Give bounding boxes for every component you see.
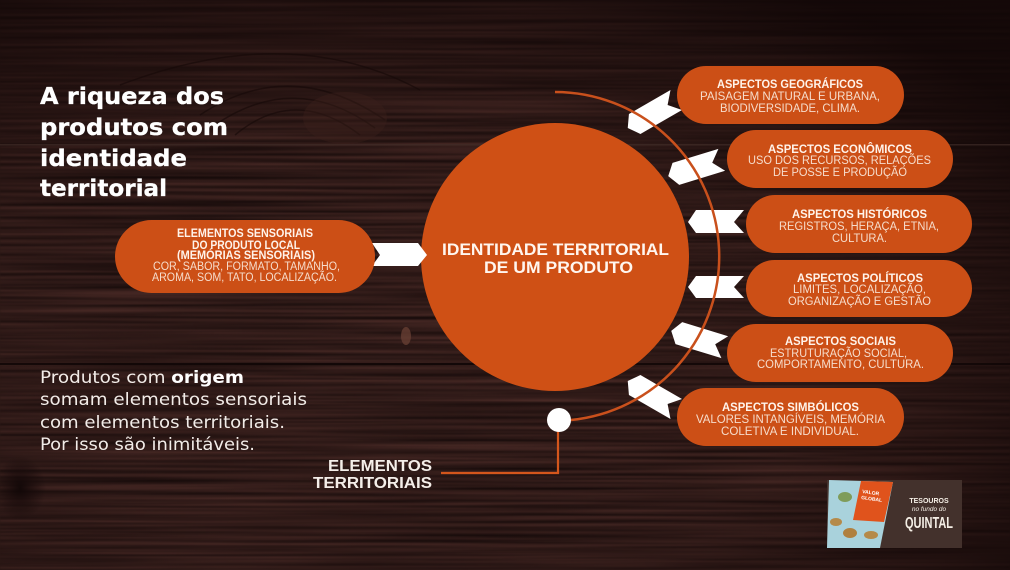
text block: origem: somam elementos sensoriais bbox=[40, 390, 307, 409]
arrow: políticos bbox=[688, 276, 744, 298]
title: territorial bbox=[40, 176, 167, 202]
panel: aspectos políticos: LIMITES, LOCALIZAÇÃO, bbox=[793, 283, 926, 296]
panel: elementos sensoriais: AROMA, SOM, TATO, LOCALIZAÇÃO. bbox=[152, 271, 337, 284]
panel: elementos sensoriais: COR, SABOR, FORMATO, TAMANHO, bbox=[153, 261, 340, 273]
label: elementos territoriais bbox=[313, 458, 432, 492]
arrow: geográficos bbox=[622, 90, 682, 138]
arrow: históricos bbox=[688, 210, 744, 233]
panel: aspectos sociais: ASPECTOS SOCIAIS bbox=[785, 336, 896, 348]
arrow: simbólicos bbox=[622, 371, 682, 419]
panel: elementos sensoriais bbox=[115, 220, 375, 293]
text: Tesouros do Quintal: no fundo do bbox=[912, 506, 947, 513]
text block: origem: com elementos territoriais. bbox=[40, 413, 285, 432]
panel: aspectos sociais: COMPORTAMENTO, CULTURA. bbox=[757, 359, 924, 371]
panel: aspectos históricos bbox=[746, 195, 972, 253]
panel: aspectos econômicos: ASPECTOS ECONÔMICOS bbox=[768, 143, 912, 156]
panel: aspectos simbólicos: ASPECTOS SIMBÓLICOS bbox=[722, 401, 859, 414]
text: Tesouros do Quintal bbox=[905, 498, 953, 532]
text block: origem bbox=[40, 368, 307, 454]
text: Tesouros do Quintal: TESOUROS bbox=[909, 498, 949, 505]
panel: aspectos econômicos bbox=[727, 130, 953, 188]
text: Tesouros do Quintal: QUINTAL bbox=[905, 515, 953, 532]
panel: elementos sensoriais: DO PRODUTO LOCAL bbox=[192, 240, 300, 252]
panel: aspectos econômicos: DE POSSE E PRODUÇÃO bbox=[773, 166, 907, 179]
arrow: sensoriais bbox=[372, 243, 427, 266]
panel: aspectos históricos: ASPECTOS HISTÓRICOS bbox=[792, 208, 927, 221]
panel: aspectos geográficos bbox=[677, 66, 904, 124]
panel: aspectos históricos: CULTURA. bbox=[832, 233, 887, 245]
panel: aspectos sociais: ESTRUTURAÇÃO SOCIAL, bbox=[770, 347, 907, 360]
panel: elementos sensoriais: ELEMENTOS SENSORIAIS bbox=[177, 228, 313, 240]
icon: book cover: GLOBAL bbox=[861, 495, 882, 504]
title: identidade bbox=[40, 146, 187, 172]
text block: origem: Por isso são inimitáveis. bbox=[40, 435, 255, 454]
panel: aspectos históricos: REGISTROS, HERAÇA, ETNIA, bbox=[779, 221, 939, 233]
title: produtos com bbox=[40, 115, 228, 141]
arrow: sociais bbox=[668, 320, 728, 358]
arc: elementos territoriais bbox=[555, 92, 719, 420]
central circle: identidade territorial: IDENTIDADE TERRITORIAL bbox=[442, 240, 669, 259]
connector: elementos territoriais bbox=[441, 408, 571, 473]
icon: book cover bbox=[827, 480, 893, 548]
central circle: identidade territorial: DE UM PRODUTO bbox=[484, 258, 633, 277]
title: A riqueza dos bbox=[40, 84, 224, 110]
panel: aspectos simbólicos bbox=[677, 388, 904, 446]
text block: origem: Produtos com origem bbox=[40, 368, 244, 387]
central circle: identidade territorial bbox=[421, 123, 689, 391]
panel: aspectos geográficos: BIODIVERSIDADE, CLIMA. bbox=[720, 103, 860, 115]
icon: book cover: VALOR bbox=[862, 489, 880, 497]
logo panel: book and Tesouros do Quintal bbox=[827, 480, 962, 548]
panel: aspectos políticos: ORGANIZAÇÃO E GESTÃO bbox=[788, 295, 931, 308]
panel: aspectos sociais bbox=[727, 324, 953, 382]
label: elementos territoriais: ELEMENTOS bbox=[328, 458, 432, 475]
panel: aspectos políticos: ASPECTOS POLÍTICOS bbox=[797, 272, 923, 285]
arrow: econômicos bbox=[665, 149, 725, 187]
label: elementos territoriais: TERRITORIAIS bbox=[313, 475, 432, 492]
panel: aspectos simbólicos: VALORES INTANGÍVEIS, MEMÓRIA bbox=[696, 413, 885, 426]
panel: aspectos geográficos: PAISAGEM NATURAL E URBANA, bbox=[700, 91, 880, 103]
panel: aspectos econômicos: USO DOS RECURSOS, RELAÇÕES bbox=[748, 154, 931, 167]
panel: aspectos simbólicos: COLETIVA E INDIVIDUAL. bbox=[721, 426, 859, 438]
panel: aspectos políticos bbox=[746, 260, 972, 317]
title bbox=[40, 84, 228, 202]
panel: aspectos geográficos: ASPECTOS GEOGRÁFICOS bbox=[717, 78, 863, 91]
panel: elementos sensoriais: (MEMÓRIAS SENSORIAIS) bbox=[177, 249, 315, 262]
